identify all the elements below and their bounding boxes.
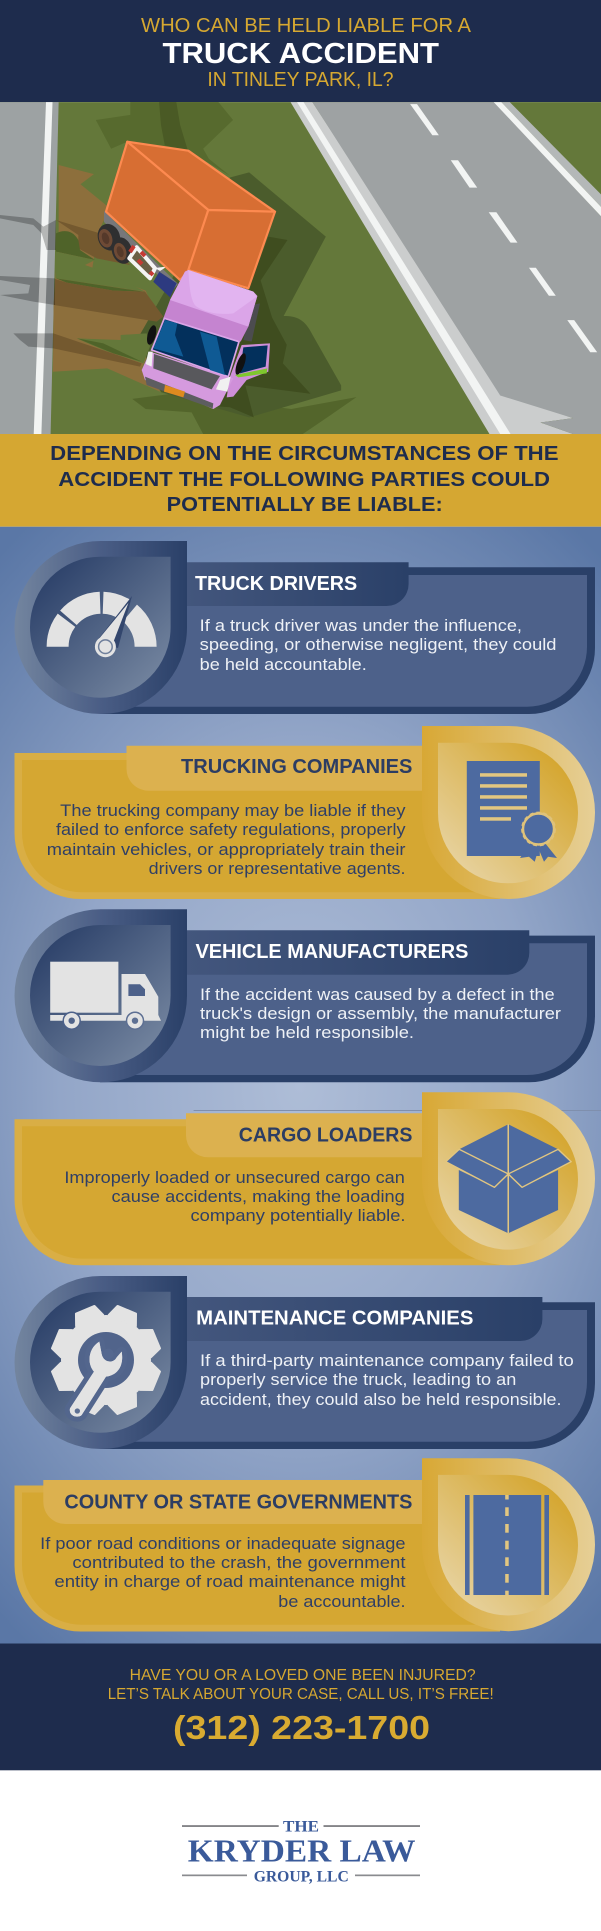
- logo: The Kryder Law Group, LLC: THE: [283, 1819, 319, 1836]
- subheading band: POTENTIALLY BE LIABLE:: [167, 493, 443, 516]
- trailer chassis and wheels: [94, 211, 178, 297]
- title: TRUCKING COMPANIES: [181, 756, 412, 778]
- body text: [64, 1169, 406, 1225]
- body text: maintain vehicles, or appropriately train their: [47, 841, 406, 859]
- body text: If a third-party maintenance company failed to: [200, 1352, 574, 1370]
- body text: drivers or representative agents.: [149, 860, 405, 878]
- card: trucking companies: [14, 726, 595, 899]
- body text: accident, they could also be held responsible.: [200, 1391, 562, 1409]
- card: county or state governments: [14, 1458, 595, 1632]
- header line 2: TRUCK ACCIDENT: [162, 38, 440, 70]
- body text: Improperly loaded or unsecured cargo can: [64, 1169, 405, 1187]
- illustration: crashed truck on roadside: [0, 102, 601, 434]
- body text: speeding, or otherwise negligent, they could: [200, 636, 556, 654]
- body text: failed to enforce safety regulations, properly: [56, 821, 406, 839]
- cab: [142, 270, 270, 409]
- logo: The Kryder Law Group, LLC: GROUP, LLC: [254, 1868, 349, 1885]
- body text: If a truck driver was under the influence,: [200, 617, 522, 635]
- skid marks and mud bands: [0, 215, 163, 367]
- body text: be accountable.: [278, 1593, 405, 1611]
- truck: [94, 142, 275, 409]
- body text: If poor road conditions or inadequate signage: [40, 1535, 405, 1553]
- body text: [47, 802, 406, 878]
- body text: entity in charge of road maintenance might: [54, 1573, 406, 1591]
- icon: open box: [446, 1124, 571, 1233]
- logo: The Kryder Law Group, LLC: KRYDER LAW: [188, 1832, 416, 1868]
- icon: road: [465, 1495, 549, 1595]
- body text: If the accident was caused by a defect in the: [200, 986, 555, 1004]
- title: COUNTY OR STATE GOVERNMENTS: [64, 1492, 412, 1514]
- header line 1: WHO CAN BE HELD LIABLE FOR A: [141, 14, 471, 37]
- phone number: (312) 223-1700: [173, 1709, 430, 1746]
- left road: [0, 102, 59, 434]
- body text: contributed to the crash, the government: [72, 1554, 406, 1572]
- body text: [200, 617, 556, 674]
- header line 3: IN TINLEY PARK, IL?: [207, 68, 394, 91]
- icon: certificate document: [467, 761, 557, 862]
- icon: speedometer: [58, 596, 146, 657]
- thin rule across card: [194, 1110, 601, 1111]
- body text: [200, 1352, 574, 1409]
- body text: might be held responsible.: [200, 1024, 414, 1042]
- title: TRUCK DRIVERS: [195, 573, 357, 595]
- subheading band: [0, 434, 601, 527]
- grass patches: [53, 102, 356, 434]
- body text: cause accidents, making the loading: [112, 1188, 405, 1206]
- body text: The trucking company may be liable if they: [60, 802, 406, 820]
- call to action text: [108, 1667, 494, 1703]
- icon: box truck: [50, 962, 161, 1029]
- body text: [200, 986, 562, 1042]
- card: truck drivers: [14, 541, 595, 714]
- header banner: [0, 0, 601, 102]
- title: MAINTENANCE COMPANIES: [196, 1307, 473, 1329]
- footer call to action: [0, 1644, 601, 1770]
- icon: gear and wrench: [50, 1304, 162, 1417]
- body text: be held accountable.: [200, 656, 367, 674]
- body text: truck's design or assembly, the manufacturer: [200, 1005, 562, 1023]
- card: maintenance companies: [14, 1276, 595, 1449]
- blue gradient background: [0, 527, 601, 1644]
- call to action text: LET’S TALK ABOUT YOUR CASE, CALL US, IT’S FREE!: [108, 1686, 494, 1703]
- call to action text: HAVE YOU OR A LOVED ONE BEEN INJURED?: [130, 1667, 476, 1684]
- card: vehicle manufacturers: [14, 909, 595, 1082]
- body text: properly service the truck, leading to an: [200, 1371, 516, 1389]
- body text: company potentially liable.: [190, 1207, 406, 1225]
- logo: The Kryder Law Group, LLC: [182, 1819, 420, 1885]
- subheading band: DEPENDING ON THE CIRCUMSTANCES OF THE: [50, 442, 558, 465]
- card: cargo loaders: [14, 1092, 595, 1265]
- title: VEHICLE MANUFACTURERS: [196, 941, 468, 963]
- body text: [40, 1535, 406, 1611]
- trailer box: [106, 142, 275, 288]
- title: CARGO LOADERS: [239, 1125, 412, 1147]
- right road: [291, 102, 601, 434]
- subheading band: ACCIDENT THE FOLLOWING PARTIES COULD: [58, 468, 550, 491]
